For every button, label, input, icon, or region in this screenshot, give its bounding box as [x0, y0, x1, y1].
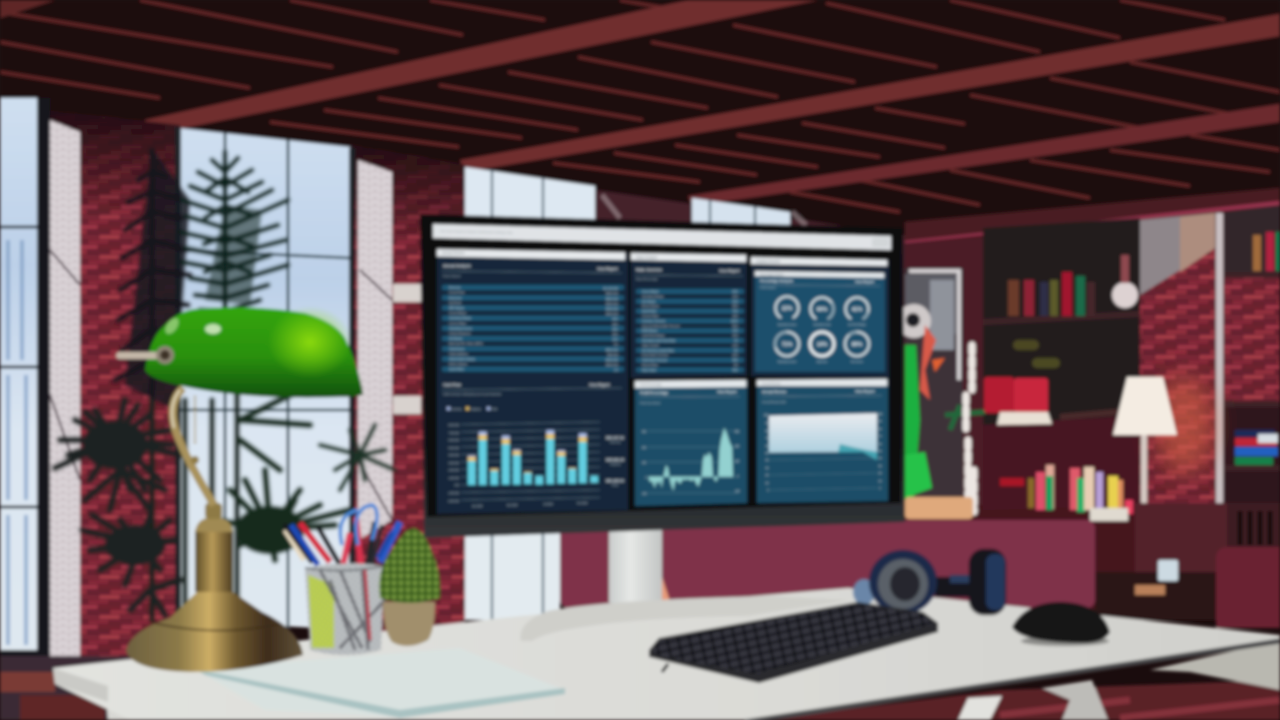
ratio table: 38% [732, 358, 739, 362]
cash flow bar chart: -1,000,000 [448, 492, 460, 495]
ratio table: 75% [732, 309, 739, 313]
cash flow bar chart: Oct 2024 [577, 501, 588, 505]
annual area chart: 30 [879, 464, 882, 468]
profit area chart: 0 [645, 476, 647, 480]
financial table: $300,000 [606, 363, 618, 367]
percentage analysis card: Percentage Analysis [760, 272, 784, 276]
ratio table: 60% [732, 290, 739, 294]
Cash Flow heading: View Report [589, 383, 611, 387]
cash flow bar chart [448, 422, 600, 508]
ratio table: 23% [732, 299, 739, 303]
annual area chart: 100 [764, 413, 769, 417]
cash flow totals: $96,047.92 [606, 436, 624, 440]
financial table: 1.5 [614, 368, 618, 372]
rear windows [465, 167, 806, 620]
percentage analysis card: 41% [852, 307, 863, 313]
financial table: Quick Ratio [449, 367, 464, 371]
financial table: Total Assets [449, 347, 465, 351]
financial table: $300,000 [606, 312, 618, 316]
annual area chart: 80 [879, 427, 882, 431]
percentage analysis card: Operating Income [777, 324, 797, 326]
financial table: Interest Expense [449, 332, 471, 336]
lamp arm [173, 388, 214, 505]
notebook [195, 648, 565, 718]
ratio table: 8% [734, 363, 739, 367]
panel: Profit Percentage: View Report [717, 390, 737, 394]
financial table: Current Ratio [449, 321, 467, 325]
annual area chart: 10 [879, 479, 882, 483]
profit area chart: 0 [737, 474, 739, 478]
panel: Annual Review chart [757, 379, 888, 503]
profit area chart: 200 [735, 444, 740, 448]
ratio table: Net Margin [642, 299, 656, 303]
monitor [420, 214, 905, 538]
financial table: $300,000 [606, 302, 618, 306]
percentage analysis card: Profit Analysis [760, 286, 776, 290]
percentage analysis card: 14% [817, 342, 828, 348]
profit area chart: 100 [642, 460, 647, 464]
monitor stand [521, 530, 850, 641]
panel: Annual Review: View Report [597, 267, 619, 271]
cash flow bar chart: Jan 2024 [472, 504, 483, 508]
panel: Annual Review chart: Annual Review [762, 382, 782, 386]
annual area chart: 80 [766, 429, 769, 433]
mesh cup [305, 563, 384, 655]
ratio table: Current Ratio [642, 314, 659, 318]
ratio table: Return Equity [642, 304, 660, 308]
legend: Outgoing [470, 407, 481, 411]
window header [635, 380, 746, 388]
cash flow bar chart: 0.00 [454, 484, 460, 487]
lamp glow on brick [1155, 375, 1215, 475]
ratio table: 15% [732, 334, 739, 338]
cash flow totals: $50,365.00 [606, 479, 624, 483]
percentage analysis card: 71% [782, 342, 793, 348]
percentage analysis card: View Report [855, 280, 875, 284]
financial table: Total Liabilities [449, 352, 468, 356]
financial table: Operating Income [449, 326, 472, 330]
financial table: $800,000 [606, 297, 618, 301]
cash flow bar chart: 3,000,000 [448, 462, 460, 465]
financial table: $90,000 [608, 353, 618, 357]
ratio table: Sales Growth [642, 343, 659, 347]
red pillows and white shelf [984, 377, 1052, 425]
financial table: $200,000 [606, 358, 618, 362]
financial table: Net Profit [449, 301, 461, 305]
cash flow totals [606, 436, 624, 487]
annual area chart: 20 [766, 473, 769, 477]
panel: Ratio Overview: Ratio Overview [636, 268, 662, 272]
cash flow bar chart: 7,000,000 [448, 432, 460, 435]
annual area chart: 20 [879, 471, 882, 475]
financial table: Shareholders Equity [449, 357, 476, 361]
annual area chart: 40 [879, 456, 882, 460]
cash flow totals: $45,683.25 [606, 458, 624, 462]
mouse [1012, 602, 1110, 646]
panel: Annual Review: Profit Channel [443, 274, 461, 278]
ratio table: Operating Margin [642, 294, 664, 298]
ratio table: Gross Margin [642, 290, 659, 294]
annual area chart: 50 [879, 449, 882, 453]
financial table: Operating Margin [449, 316, 472, 320]
desk lamp [116, 306, 363, 672]
percentage analysis card: Net Income [851, 360, 864, 364]
financial table: PBT Margin [449, 306, 465, 310]
middle window [178, 127, 352, 632]
keyboard [649, 602, 938, 683]
sofa [560, 497, 1280, 628]
pens [284, 517, 400, 565]
panel: Annual Review [437, 249, 628, 514]
percentage gauges [771, 292, 873, 356]
ratio table: Operating Cash Flow Ratio [642, 338, 676, 342]
ratio table: Accounts Receivable Turnover [642, 324, 680, 328]
percentage analysis card: 22% [782, 306, 793, 312]
panel: Annual Review: Annual Review [442, 251, 465, 255]
financial table: Earnings Per Share (EPS) [449, 342, 483, 346]
stand neck [609, 530, 662, 603]
ratio table: 14% [732, 329, 739, 333]
cash flow bar chart: 2,000,000 [448, 469, 460, 472]
ratio table: 95% [732, 304, 739, 308]
ratio table: 18% [732, 314, 739, 318]
annual area chart: 60 [879, 442, 882, 446]
screen top bar [433, 224, 891, 250]
financial table: 12% [612, 338, 618, 342]
panel: Annual Review: Annual Analysis [443, 264, 471, 268]
cash flow bar chart: 5,000,000 [448, 447, 460, 450]
profit area chart: 300 [642, 430, 647, 434]
financial table: 1% [614, 343, 618, 347]
window header [751, 257, 887, 266]
ratio table: Fixed Asset Turnover [642, 353, 668, 357]
annual area chart: 10 [766, 481, 769, 485]
financial table: $900,000 [606, 292, 618, 296]
ratio table: Net Working Capital Ratio [642, 348, 675, 352]
window header [437, 249, 625, 260]
panel: Annual Review chart: View Report [855, 390, 875, 394]
panel: Profit Percentage: Profit Percentage [640, 382, 662, 386]
percentage analysis card: Expenses [817, 360, 828, 364]
centre wall brick [350, 145, 465, 640]
ratio table: 23% [732, 294, 739, 298]
panel: Gridded Review [751, 257, 889, 378]
indoor trees [55, 148, 395, 640]
panel: Annual Review chart: Annual Review [762, 390, 786, 394]
books on shelves [1000, 232, 1280, 521]
stand base [521, 596, 850, 641]
financial table: 30% [612, 317, 618, 321]
financial table: Debt to Equity [449, 362, 468, 366]
desk top [53, 588, 1280, 720]
cabinet [1095, 503, 1280, 620]
cash flow bar chart: 1,000,000 [448, 477, 460, 480]
ratio table [636, 289, 744, 372]
panel: Ratio Overview [631, 253, 747, 378]
ratio table: 5% [734, 348, 739, 352]
floor [0, 656, 1280, 720]
ratio table: Total Asset Turnover [642, 358, 667, 362]
financial table: Gross Margin [449, 311, 467, 315]
ratio table: Inventory Turnover [642, 319, 665, 323]
window header [757, 379, 887, 386]
panel: Annual Review: Cash coming in and going out of your business [443, 392, 502, 396]
percentage analysis card: 69% [817, 307, 828, 313]
annual area chart: 60 [766, 444, 769, 448]
financial table: $500,000 [606, 348, 618, 352]
financial table [442, 285, 624, 372]
financial table: $250,000 [606, 307, 618, 311]
Cash Flow heading [443, 383, 611, 387]
lamp base [126, 592, 303, 672]
desk [53, 588, 1280, 720]
window header [631, 253, 746, 262]
framed poster and green plant [897, 268, 985, 512]
annual area chart: 0 [879, 486, 881, 490]
cash flow bar chart: 6,000,000 [448, 439, 460, 442]
ratio table: ROE Margin [642, 329, 658, 333]
right wall and bookshelves [0, 205, 1280, 720]
financial table: 15% [612, 332, 618, 336]
panel: Ratio Overview: Ratio Analysis [636, 256, 658, 260]
profit area chart: -100 [734, 489, 740, 493]
ceiling beams [145, 0, 818, 135]
ratio table: 96% [732, 324, 739, 328]
panel: Ratio Overview: View Report [719, 269, 741, 273]
panel: Profit Percentage: Profit Over Month [640, 401, 661, 405]
ratio table: Days Sales [642, 368, 657, 372]
annual area chart: 90 [879, 419, 882, 423]
ratio table: 1% [734, 338, 739, 342]
percentage analysis card: Net Profit Margin [848, 324, 867, 326]
financial table: Expenses [449, 296, 462, 300]
cash flow bar chart: Apr 2024 [507, 503, 518, 507]
annual area chart: 30 [766, 466, 769, 470]
Cash Flow heading: Cash Flow [443, 383, 461, 387]
annual area chart: 90 [766, 421, 769, 425]
ratio table: 14% [732, 343, 739, 347]
lamp column [195, 530, 233, 592]
financial table: 18% [612, 322, 618, 326]
profit area chart: -100 [641, 492, 647, 496]
financial table: Net Equity [449, 337, 463, 341]
panel: Annual Review chart: Annual Review 2024 [762, 400, 786, 404]
legend [447, 407, 497, 411]
percentage analysis card: Percentage Analysis [760, 279, 793, 283]
cash flow bar chart: 4,000,000 [448, 454, 460, 457]
cash flow bar chart: 8,000,000 [448, 424, 460, 427]
cash flow totals: Incoming [610, 440, 621, 444]
desk legs [106, 640, 1280, 720]
annual area chart: 0 [767, 488, 769, 492]
financial table: Gross Profit [449, 291, 464, 295]
profit area chart: 300 [735, 430, 740, 434]
percentage analysis card: 89% [852, 342, 863, 348]
financial table: 18% [612, 327, 618, 331]
legend: Incoming [451, 407, 462, 411]
percentage analysis card: Operating Costs [813, 324, 831, 326]
profit area chart: 200 [642, 446, 647, 450]
panel: Profit Percentage: Profit Percentage [640, 391, 668, 395]
ratio table: 100% [731, 319, 739, 323]
left wall brick [40, 110, 180, 660]
headphones [853, 549, 1006, 615]
panel: Profit Percentage [635, 380, 747, 506]
annual area chart: 100 [878, 412, 883, 416]
ratio table: Payout Ratio [642, 363, 658, 367]
cash flow bar chart: -2,000,000 [448, 500, 460, 503]
ratio table: Cash Flow Margin [642, 334, 665, 338]
annual area chart [764, 412, 883, 492]
ratio table: 26% [732, 353, 739, 357]
ratio table: 45% [732, 368, 739, 372]
financial table: $1,100,000 [604, 287, 618, 291]
screen top bar: File Home Reports Analysis Dashboards Settings Help [440, 229, 513, 235]
financial table: Revenue [449, 286, 461, 290]
ratio table: Quick Ratio [642, 309, 657, 313]
panel: Ratio Overview: Ratio Percentage [636, 277, 658, 281]
percentage analysis card [755, 271, 885, 372]
cash flow totals: Outgoing [610, 462, 621, 466]
legend: Profit [491, 407, 497, 411]
annual area chart: 70 [879, 434, 882, 438]
panel: Gridded Review: Gridded Review [756, 260, 781, 264]
left window [0, 98, 50, 658]
cash flow bar chart: Jul 2024 [543, 502, 553, 506]
lamp handle [116, 346, 174, 364]
potted plant [379, 528, 440, 646]
pale brick pillars [50, 120, 80, 660]
profit area chart: 100 [735, 459, 740, 463]
percentage analysis card: Operating Income [777, 360, 797, 364]
profit area chart [641, 428, 740, 496]
annual area chart: 50 [766, 451, 769, 455]
annual area chart: 40 [766, 458, 769, 462]
lamp shade [145, 307, 363, 398]
ceiling [0, 0, 1280, 245]
floor lamp [1113, 377, 1177, 503]
annual area chart: 70 [766, 436, 769, 440]
cash flow totals: Profit [612, 483, 618, 487]
pen holder [284, 505, 400, 655]
